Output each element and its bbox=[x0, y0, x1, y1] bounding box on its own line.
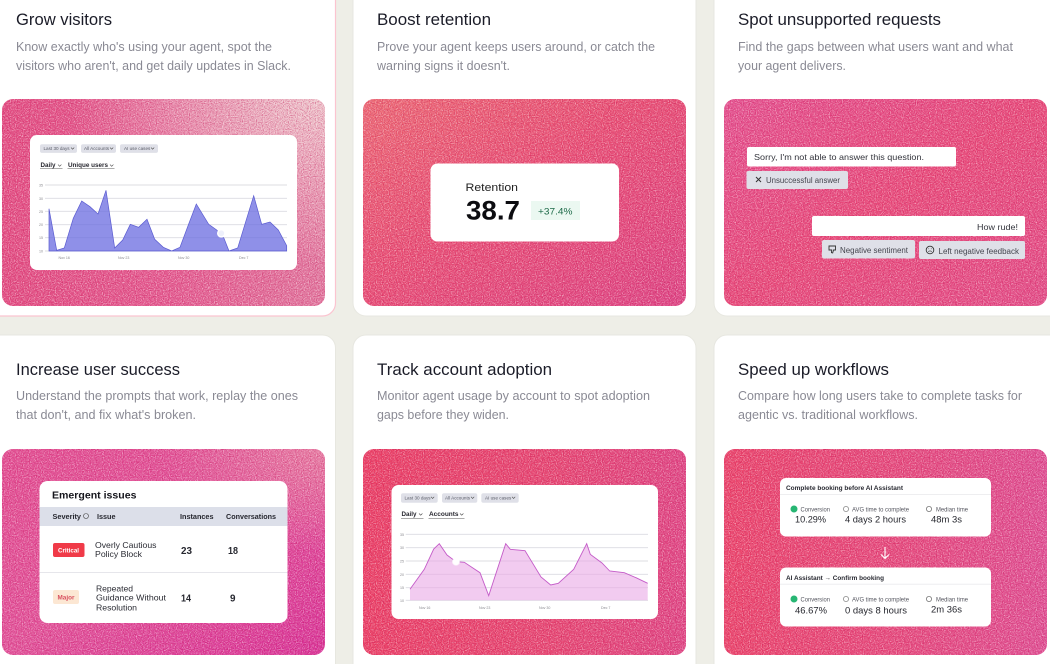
tag: left negative feedback: Left negative feedback bbox=[938, 247, 1020, 256]
row: critical issue: 18 bbox=[228, 546, 238, 557]
table header: Issue bbox=[97, 514, 116, 521]
area chart: unique users: 20 bbox=[39, 223, 43, 227]
row: major issue: Major bbox=[58, 594, 75, 602]
filter chips: Last 30 days bbox=[404, 496, 431, 501]
chat bubble: user message: How rude! bbox=[977, 222, 1018, 232]
metric: average time bbox=[843, 596, 909, 616]
workflow card: before AI assistant bbox=[780, 478, 991, 536]
table title: Emergent issues bbox=[52, 490, 137, 502]
metric: conversion: 10.29% bbox=[795, 514, 826, 526]
dropdowns: daily and unique users: Unique users bbox=[68, 162, 108, 169]
chart card: unique users bbox=[30, 135, 297, 270]
change badge: +37.4% bbox=[538, 206, 573, 218]
description: spot unsupported requests: Find the gaps between what users want and what bbox=[738, 40, 1014, 54]
area chart: accounts: 15 bbox=[400, 586, 404, 590]
workflow card: with AI assistant bbox=[780, 568, 991, 626]
metric: median time: 48m 3s bbox=[931, 514, 962, 526]
filter chips: AI use cases bbox=[124, 146, 151, 151]
row: major issue bbox=[53, 584, 236, 612]
filter chips: AI use cases bbox=[485, 496, 512, 501]
workflow card: with AI assistant: AI Assistant → Confirm booking bbox=[786, 575, 884, 582]
image panel: gradient backdrop bbox=[363, 449, 686, 655]
metric: average time: 4 days 2 hours bbox=[845, 514, 906, 526]
dropdowns: daily and unique users: Daily bbox=[40, 162, 56, 169]
area chart: unique users: 15 bbox=[39, 236, 43, 240]
metric: conversion bbox=[790, 506, 830, 526]
heading: boost retention: Boost retention bbox=[377, 10, 491, 29]
table header bbox=[40, 507, 288, 526]
area chart: unique users: 10 bbox=[39, 250, 43, 254]
description: boost retention bbox=[376, 40, 655, 73]
dropdowns: daily and accounts: Daily bbox=[402, 511, 417, 518]
metric: average time: AVG time to complete bbox=[852, 506, 909, 514]
description: spot unsupported requests: your agent delivers. bbox=[738, 59, 846, 73]
image panel: gradient backdrop bbox=[2, 99, 325, 306]
dropdowns: daily and unique users bbox=[40, 162, 114, 169]
panel: spot unsupported requests bbox=[714, 0, 1050, 316]
dropdowns: daily and accounts: Accounts bbox=[429, 511, 459, 518]
heading: speed up workflows: Speed up workflows bbox=[738, 360, 889, 379]
area chart: accounts bbox=[400, 533, 648, 610]
area chart: accounts: 20 bbox=[400, 573, 404, 577]
panel: track account adoption bbox=[353, 335, 696, 664]
row: major issue: Repeated bbox=[96, 584, 133, 594]
area chart: accounts: Dec 7 bbox=[601, 606, 610, 610]
heading: track account adoption: Track account adoption bbox=[377, 360, 552, 379]
area chart: accounts: Nov 16 bbox=[419, 606, 430, 610]
chat bubble: user message bbox=[812, 216, 1025, 236]
area chart: unique users: Nov 30 bbox=[178, 256, 189, 260]
chat bubble: agent reply: Sorry, I'm not able to answer this question. bbox=[754, 152, 924, 162]
metric: average time: 0 days 8 hours bbox=[845, 606, 907, 616]
metric: median time: Median time bbox=[936, 596, 968, 604]
description: increase user success bbox=[16, 389, 298, 422]
issues table card bbox=[40, 481, 288, 623]
heading: spot unsupported requests: Spot unsupported requests bbox=[738, 10, 941, 29]
row: critical issue: Overly Cautious bbox=[95, 541, 156, 550]
description: grow visitors: visitors who aren't, and get daily updates in Slack. bbox=[16, 59, 291, 73]
description: track account adoption: Monitor agent usage by account to spot adoption bbox=[377, 389, 650, 403]
row: major issue: Resolution bbox=[96, 604, 137, 612]
arrow: down bbox=[881, 547, 889, 558]
metric: conversion bbox=[790, 596, 830, 616]
row: critical issue: Critical bbox=[58, 548, 79, 554]
area chart: unique users: 30 bbox=[39, 197, 43, 201]
description: speed up workflows: Compare how long users take to complete tasks for bbox=[738, 389, 1022, 403]
metric: median time bbox=[926, 506, 968, 526]
area chart: unique users bbox=[39, 184, 287, 260]
retention card bbox=[430, 164, 619, 242]
area chart: unique users: Dec 7 bbox=[239, 256, 248, 260]
area chart: accounts: Nov 30 bbox=[539, 606, 550, 610]
workflow card: before AI assistant: Complete booking before AI Assistant bbox=[786, 485, 904, 492]
description: speed up workflows bbox=[738, 389, 1022, 422]
image panel: gradient backdrop bbox=[2, 449, 325, 655]
description: track account adoption: gaps before they widen. bbox=[377, 408, 509, 422]
tag: unsuccessful answer: Unsuccessful answer bbox=[766, 176, 840, 185]
area chart: accounts: 25 bbox=[400, 560, 404, 564]
table header: Conversations bbox=[226, 514, 276, 521]
metric: conversion: Conversion bbox=[800, 596, 830, 604]
area chart: unique users: 35 bbox=[39, 184, 43, 188]
heading: increase user success: Increase user success bbox=[16, 360, 180, 379]
description: grow visitors bbox=[16, 40, 291, 73]
row: major issue: Guidance Without bbox=[96, 594, 167, 602]
retention value: 38.7 bbox=[466, 196, 520, 226]
panel: increase user success bbox=[0, 335, 336, 664]
row: major issue: 14 bbox=[181, 594, 191, 604]
description: increase user success: Understand the prompts that work, replay the ones bbox=[16, 389, 298, 403]
description: speed up workflows: agentic vs. traditional workflows. bbox=[738, 408, 918, 422]
area chart: accounts: 35 bbox=[400, 533, 404, 537]
hover marker bbox=[218, 230, 225, 237]
metric: average time bbox=[843, 506, 909, 526]
tag: left negative feedback bbox=[919, 241, 1025, 259]
area chart: accounts: Nov 23 bbox=[479, 606, 490, 610]
metric: median time: 2m 36s bbox=[931, 604, 962, 616]
tag: negative sentiment: Negative sentiment bbox=[840, 246, 909, 255]
area chart: unique users: Nov 23 bbox=[118, 256, 129, 260]
metric: conversion: 46.67% bbox=[795, 606, 827, 616]
metric: average time: AVG time to complete bbox=[852, 596, 909, 604]
tag: negative sentiment bbox=[822, 240, 915, 258]
area chart: unique users: 25 bbox=[39, 210, 43, 214]
row: critical issue: Policy Block bbox=[95, 550, 143, 559]
filter chips: Last 30 days bbox=[44, 146, 70, 151]
description: increase user success: that don't, and fix what's broken. bbox=[16, 408, 196, 422]
filter chips: All Accounts bbox=[445, 496, 471, 501]
change badge bbox=[531, 201, 580, 220]
image panel: gradient backdrop bbox=[363, 99, 686, 306]
hover marker bbox=[453, 558, 459, 565]
area chart: unique users: Nov 16 bbox=[58, 256, 70, 260]
retention label: Retention bbox=[466, 182, 518, 194]
image panel: gradient backdrop bbox=[724, 449, 1047, 655]
area chart: accounts: 10 bbox=[400, 599, 404, 603]
description: boost retention: Prove your agent keeps users around, or catch the bbox=[377, 40, 655, 54]
filter chips bbox=[40, 144, 158, 153]
description: boost retention: warning signs it doesn't. bbox=[376, 59, 510, 73]
description: spot unsupported requests bbox=[738, 40, 1014, 73]
image panel: gradient backdrop bbox=[724, 99, 1047, 306]
metric: conversion: Conversion bbox=[800, 506, 830, 514]
filter chips bbox=[401, 493, 519, 503]
row: major issue: 9 bbox=[230, 594, 236, 604]
panel: grow visitors bbox=[0, 0, 336, 316]
heading: grow visitors: Grow visitors bbox=[16, 10, 112, 29]
row: critical issue bbox=[53, 541, 238, 559]
dropdowns: daily and accounts bbox=[401, 511, 464, 519]
metric: median time: Median time bbox=[936, 506, 968, 514]
description: grow visitors: Know exactly who's using your agent, spot the bbox=[16, 40, 272, 54]
description: track account adoption bbox=[377, 389, 650, 422]
table header: Severity bbox=[52, 514, 81, 521]
chat bubble: agent reply bbox=[747, 147, 956, 166]
area chart: accounts: 30 bbox=[400, 546, 404, 550]
row: critical issue: 23 bbox=[181, 546, 192, 557]
tag: unsuccessful answer bbox=[746, 171, 848, 189]
panel: speed up workflows bbox=[714, 335, 1050, 664]
filter chips: All Accounts bbox=[84, 146, 110, 151]
panel: boost retention bbox=[353, 0, 696, 316]
table header: Instances bbox=[180, 514, 214, 521]
chart card: accounts bbox=[392, 485, 658, 619]
metric: median time bbox=[926, 596, 968, 616]
